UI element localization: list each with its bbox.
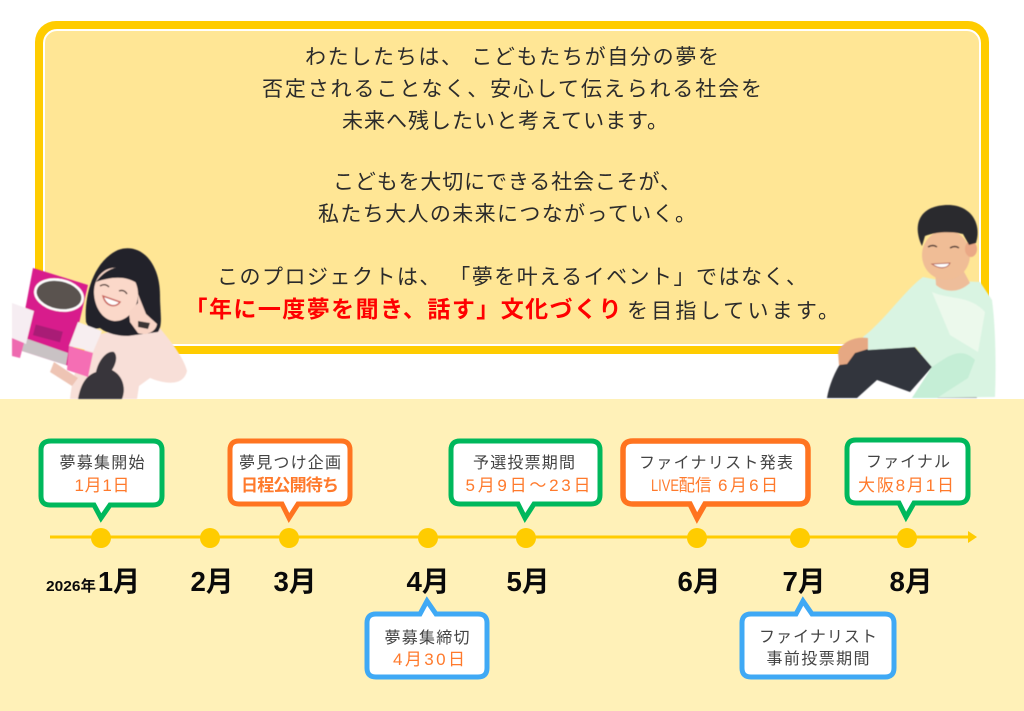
- message text: first paragraph: 否定されることなく、安心して伝えられる社会を: [262, 78, 762, 101]
- month labels: 1月: [98, 566, 140, 597]
- month labels: 5月: [506, 566, 550, 597]
- message text: first paragraph: [262, 46, 762, 133]
- month labels: 8月: [890, 566, 932, 597]
- message text: second paragraph: こどもを大切にできる社会こそが、: [333, 171, 681, 194]
- callout: 予選投票期間: 予選投票期間: [473, 454, 575, 472]
- message text: third paragraph: を目指しています。: [627, 300, 839, 323]
- month labels: 7月: [782, 566, 826, 597]
- photo: girl with toy: [12, 248, 187, 399]
- timeline axis: [50, 528, 977, 548]
- callout: 夢募集締切: 4月30日: [393, 650, 465, 669]
- callout: 夢見つけ企画: 夢見つけ企画: [239, 454, 341, 472]
- callout: 夢募集締切: 夢募集締切: [384, 629, 470, 647]
- callout: ファイナル: ファイナル: [866, 454, 950, 471]
- month labels: 3月: [274, 566, 316, 597]
- photo: boy sitting: [827, 205, 996, 398]
- callout: ファイナリスト事前投票期間: 事前投票期間: [766, 650, 870, 668]
- message text: first paragraph: わたしたちは、 こどもたちが自分の夢を: [305, 46, 719, 69]
- message text: third paragraph: このプロジェクトは、 「夢を叶えるイベント」ではなく、: [217, 266, 807, 289]
- timeline background band: [0, 399, 1024, 711]
- callout: 予選投票期間: 5月9日～23日: [466, 476, 590, 495]
- callout: 夢募集開始: 夢募集開始: [60, 454, 144, 472]
- callout: ファイナル: 大阪8月1日: [858, 476, 954, 495]
- callout: ファイナリスト発表: 配信: [678, 476, 712, 495]
- callout: ファイナリスト事前投票期間: ファイナリスト: [759, 629, 877, 646]
- message text: first paragraph: 未来へ残したいと考えています。: [342, 110, 668, 133]
- message panel: [35, 21, 989, 354]
- message text: third paragraph: 「年に一度夢を聞き、話す」文化づくり: [184, 296, 622, 322]
- month labels: 2月: [190, 566, 234, 597]
- month labels: 4月: [406, 566, 450, 597]
- callout: ファイナリスト発表: ファイナリスト発表: [639, 454, 793, 472]
- callout: 予選投票期間: [451, 441, 600, 518]
- callout: ファイナリスト発表: 6月6日: [718, 476, 778, 495]
- callout: ファイナリスト発表: LIVE: [651, 476, 679, 495]
- callout: 夢見つけ企画: 日程公開待ち: [241, 476, 339, 495]
- callout: 夢募集開始: 1月1日: [74, 476, 130, 495]
- callout: 夢募集開始: [41, 441, 162, 518]
- callout: ファイナル: [847, 440, 968, 517]
- month labels: [46, 566, 932, 597]
- callout: 夢見つけ企画: [230, 441, 350, 518]
- callout: ファイナリスト発表: [623, 441, 808, 518]
- callout: 夢募集締切: [367, 601, 487, 677]
- callout: ファイナリスト事前投票期間: [742, 601, 894, 677]
- message text: second paragraph: [318, 171, 696, 226]
- message text: second paragraph: 私たち大人の未来につながっていく。: [318, 203, 696, 226]
- month labels: 6月: [678, 566, 720, 597]
- month labels: 2026年: [46, 577, 96, 595]
- message text: third paragraph: [184, 266, 839, 323]
